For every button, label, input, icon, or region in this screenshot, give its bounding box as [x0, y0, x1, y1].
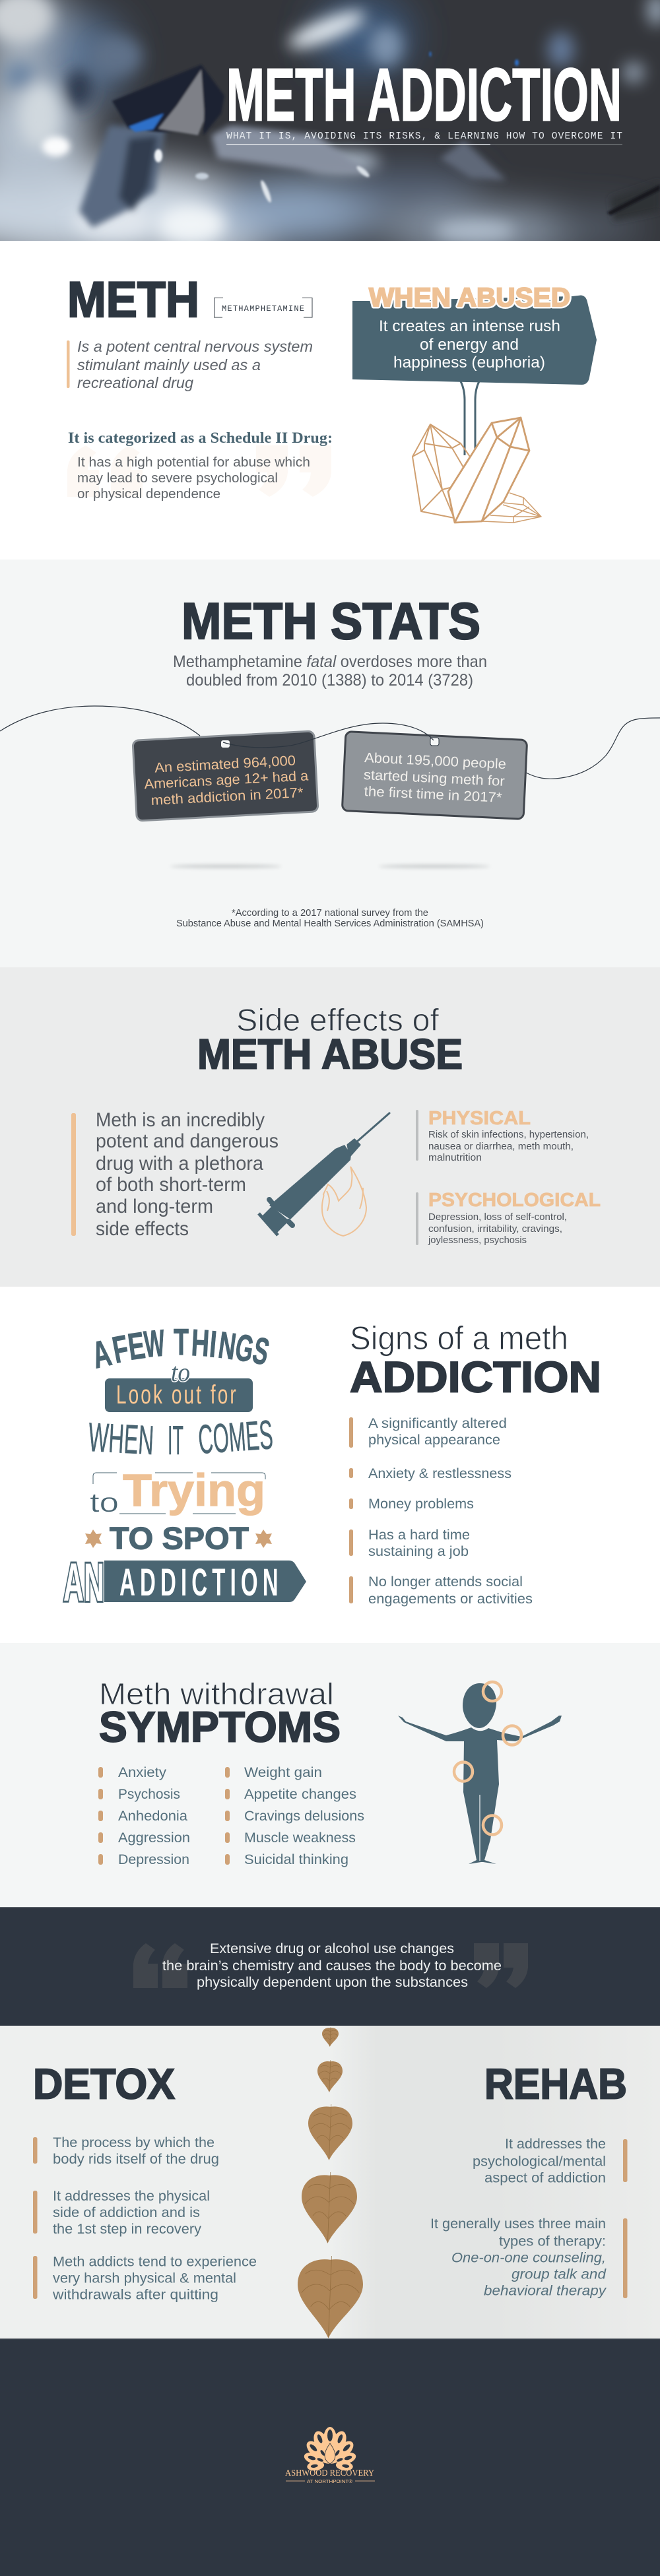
faint quote marks	[67, 445, 331, 497]
symptoms list: column two: Weight gain	[244, 1765, 322, 1780]
frame around trying	[93, 1473, 265, 1514]
wire over cards	[223, 718, 660, 779]
icon: flame	[322, 1167, 366, 1236]
heading: detox: DETOX	[33, 2060, 175, 2108]
heading: meth withdrawal: Meth withdrawal	[99, 1677, 334, 1711]
rehab list	[430, 2137, 627, 2299]
card shadows	[170, 864, 490, 868]
curved line: a few things: W	[143, 1322, 166, 1365]
curved line: a few things: E	[125, 1324, 148, 1368]
symptoms list: column one: Anhedonia	[118, 1809, 187, 1824]
heading: symptoms: SYMPTOMS	[99, 1702, 341, 1751]
bracket label: methamphetamine	[214, 298, 312, 317]
panel: hero header	[0, 0, 660, 264]
panel: dark quote	[0, 1907, 660, 2026]
when abused heading: WHEN ABUSED	[369, 283, 570, 312]
psychological effects: joylessness, psychosis	[428, 1235, 527, 1246]
symptoms list: column two: Muscle weakness	[244, 1830, 356, 1846]
side effects description: side effects	[96, 1218, 189, 1240]
word: to: to	[90, 1487, 119, 1518]
panel: meth stats	[0, 560, 660, 967]
physical effects: malnutrition	[428, 1152, 482, 1163]
panel: what is meth	[0, 241, 660, 560]
physical effects: Risk of skin infections, hypertension,	[428, 1129, 589, 1140]
definition text block: stimulant mainly used as a	[77, 356, 261, 373]
panel: side effects	[0, 967, 660, 1287]
detox list: The process by which the	[53, 2135, 214, 2150]
when abused heading: WHEN ABUSED	[369, 283, 570, 312]
sign text	[379, 317, 560, 371]
symptoms list: column one: Anxiety	[118, 1765, 167, 1780]
sign board	[352, 283, 597, 385]
symptoms list: column two: Suicidal thinking	[244, 1852, 348, 1867]
signs list: Anxiety & restlessness	[368, 1466, 512, 1481]
icon: syringe	[259, 1113, 389, 1235]
subtitle: WHAT IT IS, AVOIDING ITS RISKS, & LEARNING HOW TO OVERCOME IT	[226, 131, 622, 142]
signs list: sustaining a job	[368, 1544, 469, 1559]
signs list: Money problems	[368, 1497, 474, 1512]
panel: footer	[0, 2338, 660, 2576]
footnote: *According to a 2017 national survey from the	[232, 907, 428, 918]
signs list: No longer attends social	[368, 1574, 523, 1590]
detox list: body rids itself of the drug	[53, 2152, 219, 2167]
logo: lotus mark	[303, 2427, 357, 2472]
side effects description: potent and dangerous	[96, 1130, 279, 1152]
icon: right star	[255, 1530, 272, 1548]
symptoms list: column one	[98, 1765, 190, 1867]
side effects description	[71, 1109, 279, 1240]
hero crystal photo background	[0, 0, 660, 264]
curved line: a few things: H	[190, 1322, 211, 1365]
signs list: engagements or activities	[368, 1592, 533, 1607]
detox list	[33, 2135, 257, 2303]
signs list: physical appearance	[368, 1433, 500, 1448]
psychological effects: confusion, irritability, cravings,	[428, 1223, 562, 1235]
psychological effects: PSYCHOLOGICAL	[428, 1190, 601, 1211]
detox list: very harsh physical & mental	[53, 2271, 236, 2286]
rehab list: It generally uses three main	[430, 2216, 606, 2232]
definition text block: Is a potent central nervous system	[77, 338, 313, 355]
card: 195,000: About 195,000 people	[364, 750, 506, 772]
logo: tagline: AT NORTHPOINT®	[307, 2478, 352, 2484]
side effects description: Meth is an incredibly	[96, 1109, 265, 1131]
heading: rehab: REHAB	[484, 2060, 627, 2108]
psychological effects	[416, 1190, 601, 1246]
heading: addiction: ADDICTION	[350, 1353, 601, 1401]
heading: signs of a meth: Signs of a meth	[350, 1320, 568, 1357]
curved line: a few things: S	[249, 1328, 273, 1373]
detox list: It addresses the physical	[53, 2189, 210, 2204]
detox list: the 1st step in recovery	[53, 2222, 202, 2237]
card: 964,000	[133, 731, 318, 821]
signs list: Has a hard time	[368, 1528, 470, 1543]
card: 964,000: An estimated 964,000	[154, 753, 296, 776]
quote marks	[133, 1943, 528, 1988]
panel: withdrawal symptoms	[0, 1643, 660, 1907]
rehab list: It addresses the	[505, 2137, 606, 2152]
curved line: a few things	[88, 1321, 273, 1377]
rehab list: aspect of addiction	[484, 2171, 606, 2185]
curved line: a few things: G	[232, 1326, 257, 1370]
card: 964,000: Americans age 12+ had a	[144, 768, 309, 792]
card: 964,000: meth addiction in 2017*	[150, 785, 304, 808]
heading: meth: METH	[67, 272, 199, 328]
physical effects: PHYSICAL	[428, 1108, 531, 1129]
panel: signs of addiction	[0, 1287, 660, 1643]
panel: detox and rehab	[0, 2026, 660, 2339]
banner: an addiction: ADDICTION	[119, 1561, 283, 1605]
curved line: a few things: N	[216, 1324, 238, 1368]
symptoms list: column two: Appetite changes	[244, 1787, 356, 1802]
logo: name: ASHWOOD RECOVERY	[285, 2468, 374, 2478]
symptoms list: column one: Aggression	[118, 1830, 190, 1846]
icon: crystals	[412, 418, 541, 523]
symptoms list: column two: Cravings delusions	[244, 1809, 364, 1824]
symptom rings	[454, 1682, 521, 1834]
detox list: Meth addicts tend to experience	[53, 2254, 257, 2270]
sign text: happiness (euphoria)	[393, 354, 545, 371]
card: 195,000	[342, 732, 527, 819]
rehab list: types of therapy:	[499, 2234, 606, 2249]
side effects description: and long-term	[96, 1196, 213, 1217]
definition text block	[67, 338, 313, 391]
rehab list: behavioral therapy	[484, 2283, 607, 2299]
schedule II text: may lead to severe psychological	[77, 470, 278, 486]
heading: meth stats: METH STATS	[182, 592, 480, 650]
signs list	[349, 1416, 533, 1607]
badge: look out for: Look out for	[116, 1380, 238, 1409]
symptoms list: column two	[225, 1765, 364, 1867]
word: trying: Trying	[123, 1465, 265, 1516]
schedule II heading: It is categorized as a Schedule II Drug:	[68, 430, 333, 446]
rehab list: One-on-one counseling,	[451, 2250, 606, 2266]
signs list: A significantly altered	[368, 1416, 507, 1431]
sign text: of energy and	[420, 336, 519, 354]
stat intro text: Methamphetamine fatal overdoses more than	[173, 653, 487, 671]
curved line: a few things: I	[208, 1323, 218, 1366]
icon: human figure with rings	[398, 1682, 562, 1864]
logo: ashwood recovery	[285, 2427, 375, 2484]
line: when it comes: COMES	[197, 1412, 275, 1463]
stat intro text	[173, 653, 487, 690]
sign text: It creates an intense rush	[379, 317, 560, 335]
lettering block: a few things to look out for	[63, 1321, 306, 1613]
psychological effects: Depression, loss of self-control,	[428, 1211, 567, 1223]
banner: an addiction: AN	[63, 1553, 104, 1613]
rehab list: group talk and	[512, 2267, 607, 2282]
icon: signpost pole	[461, 381, 479, 455]
icon: left star	[85, 1530, 102, 1548]
curved line: a few things: T	[174, 1321, 189, 1363]
schedule II text: It has a high potential for abuse which	[77, 455, 310, 470]
detox list: withdrawals after quitting	[52, 2287, 218, 2303]
line: when it comes: IT	[168, 1418, 183, 1464]
physical effects	[416, 1108, 589, 1163]
schedule II text: or physical dependence	[77, 486, 220, 501]
footnote	[176, 907, 484, 929]
symptoms list: column one: Psychosis	[118, 1787, 180, 1802]
physical effects: nausea or diarrhea, meth mouth,	[428, 1141, 574, 1152]
curved line: a few things: A	[88, 1332, 115, 1377]
hanging wire left	[0, 706, 200, 736]
line: when it comes: WHEN	[87, 1415, 155, 1464]
quote text: Extensive drug or alcohol use changes	[210, 1941, 454, 1956]
footnote: Substance Abuse and Mental Health Services Administration (SAMHSA)	[176, 918, 484, 929]
bracket label: methamphetamine: METHAMPHETAMINE	[222, 304, 304, 313]
line: when it comes	[87, 1412, 275, 1464]
icon: growing leaves	[298, 2027, 363, 2338]
rehab list: psychological/mental	[473, 2154, 606, 2170]
curved line: a few things: F	[109, 1328, 132, 1372]
side effects description: of both short-term	[96, 1174, 246, 1196]
quote text: the brain’s chemistry and causes the body to become	[162, 1958, 502, 1974]
detox list: side of addiction and is	[53, 2205, 200, 2220]
symptoms list: column one: Depression	[118, 1852, 189, 1867]
card: 195,000: the first time in 2017*	[364, 784, 502, 806]
card: 195,000: started using meth for	[363, 767, 505, 789]
schedule II text	[77, 455, 310, 501]
heading: meth abuse: METH ABUSE	[197, 1031, 463, 1078]
banner: an addiction	[63, 1553, 306, 1613]
word: to spot: TO SPOT	[110, 1520, 249, 1556]
heading: side effects of: Side effects of	[236, 1002, 440, 1037]
quote text	[162, 1941, 502, 1990]
script: to: to	[171, 1357, 190, 1387]
stat intro text: doubled from 2010 (1388) to 2014 (3728)	[186, 671, 473, 690]
definition text block: recreational drug	[77, 374, 193, 391]
side effects description: drug with a plethora	[96, 1153, 263, 1175]
quote text: physically dependent upon the substances	[197, 1975, 468, 1990]
